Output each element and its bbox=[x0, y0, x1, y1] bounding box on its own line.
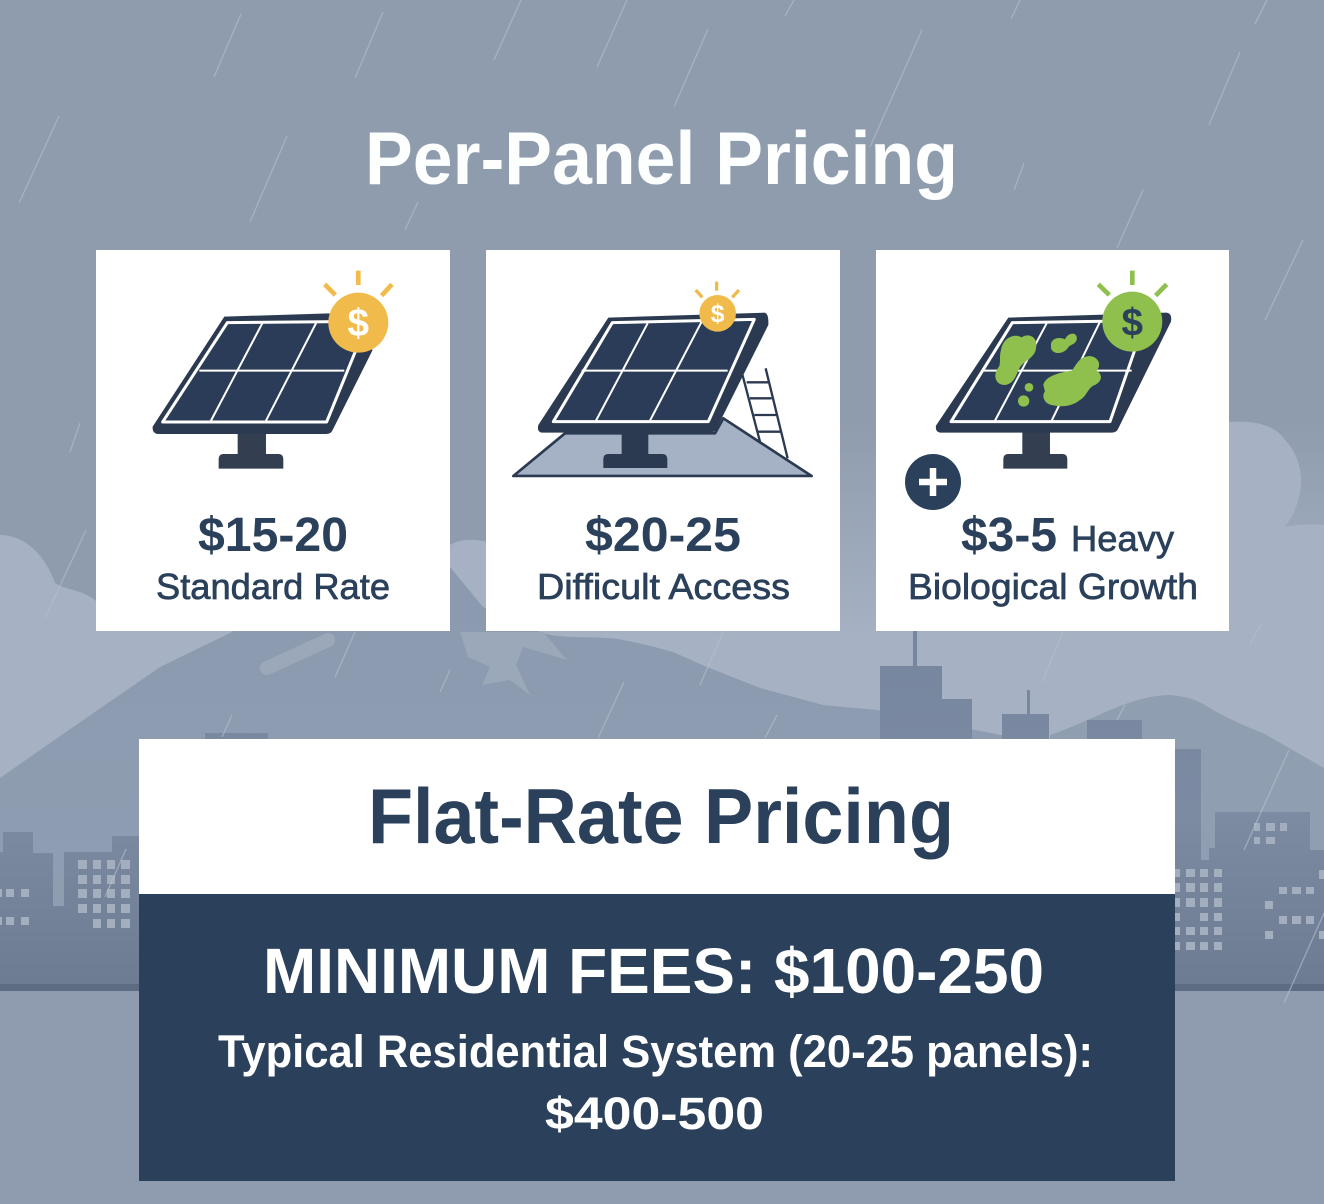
price: $3-5 bbox=[961, 509, 1057, 562]
panel: heavy biological growth bbox=[876, 250, 1229, 631]
heading: Flat-Rate Pricing bbox=[368, 772, 954, 860]
icon: solar panel with gold coin: $ bbox=[348, 302, 369, 345]
icon: plus badge bbox=[905, 454, 961, 510]
icon: roof-mounted panel with ladder bbox=[513, 282, 812, 476]
panel: difficult access bbox=[486, 250, 840, 631]
label line two: Biological Growth bbox=[908, 566, 1198, 607]
minimum fees text: MINIMUM FEES: $100-250 bbox=[263, 935, 1044, 1007]
panel: minimum fees bbox=[139, 894, 1175, 1181]
label: Difficult Access bbox=[537, 566, 790, 607]
typical system price: $400-500 bbox=[545, 1088, 764, 1139]
icon: solar panel with gold coin bbox=[153, 271, 392, 469]
price: $15-20 bbox=[198, 509, 348, 562]
icon: roof-mounted panel with ladder: $ bbox=[711, 301, 725, 328]
title: Per-Panel Pricing bbox=[365, 116, 958, 200]
icon: solar panel with green growth bbox=[936, 271, 1171, 469]
price: $20-25 bbox=[585, 509, 741, 562]
label: Heavy bbox=[1071, 518, 1174, 559]
icon: solar panel with green growth: $ bbox=[1122, 301, 1143, 344]
typical system text: Typical Residential System (20-25 panels): bbox=[218, 1026, 1093, 1077]
panel: standard rate bbox=[96, 250, 450, 631]
label: Standard Rate bbox=[156, 566, 390, 607]
panel: flat-rate header bbox=[139, 739, 1175, 895]
